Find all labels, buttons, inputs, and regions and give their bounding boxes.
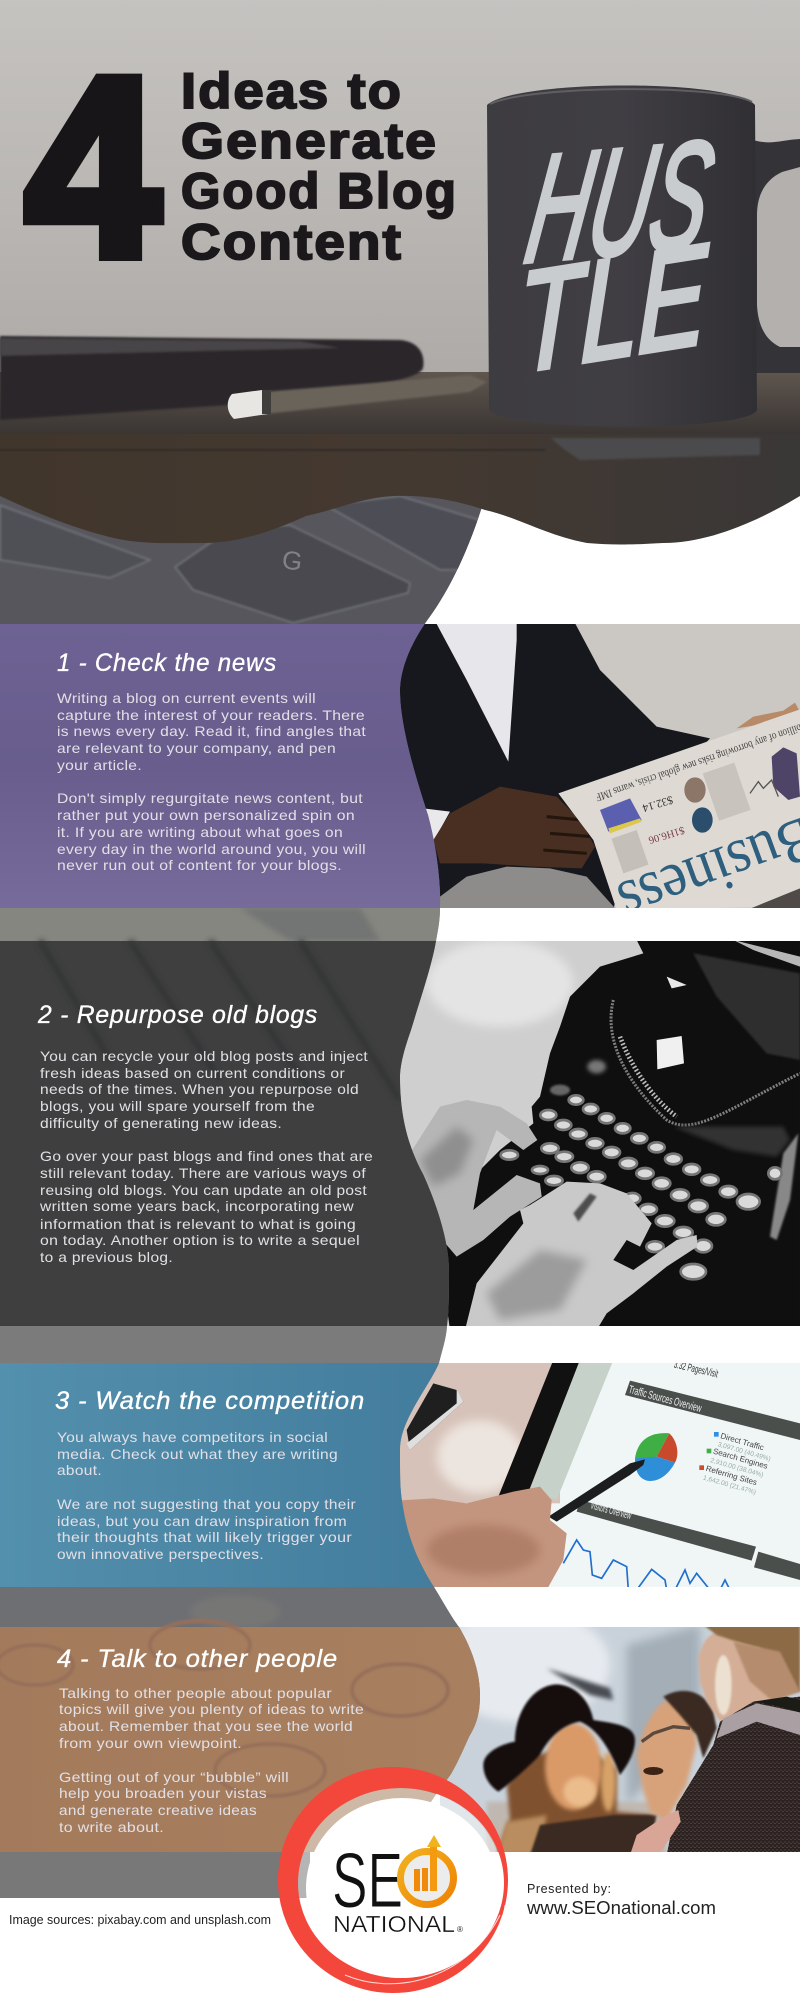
body 1: it. If you are writing about what goes on — [57, 824, 343, 840]
chart: pie — [635, 1433, 677, 1481]
body 3: about. — [57, 1462, 102, 1478]
photo: typewriter keys — [501, 1095, 782, 1279]
text block: 4 talk to other people — [57, 1645, 364, 1835]
panel: 2 repurpose old blogs background — [0, 941, 455, 1326]
mug — [487, 85, 800, 426]
desk top sheen — [0, 372, 800, 434]
body 1: Writing a blog on current events will — [57, 690, 316, 706]
body 3: their thoughts that will likely trigger your — [57, 1529, 352, 1545]
body 1: never run out of content for your blogs. — [57, 857, 342, 873]
body 4: help you broaden your vistas — [59, 1785, 267, 1801]
title: ideas to generate good blog content — [181, 63, 458, 270]
body 3: ideas, but you can draw inspiration from — [57, 1513, 347, 1529]
chart: legend: Direct Traffic — [719, 1431, 765, 1452]
background keyboard panel: G — [280, 544, 304, 577]
image sources note: Image sources: pixabay.com and unsplash.com — [9, 1913, 271, 1927]
pen — [228, 375, 487, 419]
photo: mug on desk header — [0, 0, 800, 552]
body 1 — [57, 690, 366, 873]
photo: typewriter and hands — [380, 940, 800, 1330]
photo: hand — [630, 1810, 681, 1855]
body 3: own innovative perspectives. — [57, 1546, 264, 1562]
photo: newspaper reader — [400, 624, 800, 908]
text block: 1 check the news — [57, 649, 366, 873]
photo: black hat — [483, 1684, 635, 1792]
logo: brush streaks — [345, 1905, 505, 1984]
body 4: Getting out of your “bubble” will — [59, 1769, 289, 1785]
photo: analytics tablet and pen — [380, 1359, 800, 1590]
photo: pen — [548, 1459, 645, 1522]
body 1: your article. — [57, 757, 142, 773]
logo: SE letters: SE — [332, 1836, 403, 1924]
photo text: newspaper figure two: $1H6.06 — [646, 824, 686, 845]
website url: www.SEOnational.com — [526, 1898, 716, 1918]
panel: 3 watch the competition background — [0, 1363, 445, 1587]
mug lettering TLE: TLE — [517, 213, 709, 402]
photo: face two — [637, 1700, 697, 1822]
body 2: written some years back, incorporating new — [39, 1198, 355, 1214]
desk — [0, 434, 800, 544]
heading 2: 2 - Repurpose old blogs — [37, 1001, 318, 1029]
body 3: You always have competitors in social — [57, 1429, 328, 1445]
chart: legend: 2,910.00 (38.04%) — [709, 1457, 764, 1479]
text block: 3 watch the competition — [55, 1387, 365, 1562]
body 1: are relevant to your company, and pen — [57, 740, 336, 756]
background keyboard panel — [0, 480, 500, 1900]
title: ideas to generate good blog content: Generate — [181, 113, 438, 169]
body 4: and generate creative ideas — [59, 1802, 257, 1818]
body 1: rather put your own personalized spin on — [57, 807, 355, 823]
logo: red brush ring — [278, 1767, 508, 1993]
body 2: fresh ideas based on current conditions or — [40, 1065, 345, 1081]
body 2: You can recycle your old blog posts and inject — [40, 1048, 368, 1064]
body 4 — [59, 1685, 364, 1835]
body 4: to write about. — [59, 1819, 164, 1835]
title: ideas to generate good blog content: Content — [181, 214, 403, 270]
heading 4: 4 - Talk to other people — [57, 1645, 338, 1673]
logo: registered mark: ® — [457, 1925, 463, 1934]
photo: sweater — [667, 1697, 800, 1855]
body 1: every day in the world around you, you will — [57, 841, 366, 857]
title: ideas to generate good blog content: Good Blog — [181, 163, 458, 219]
body 2: reusing old blogs. You can update an old post — [40, 1182, 367, 1198]
chart: legend — [699, 1431, 771, 1496]
logo: SEO National — [278, 1767, 508, 1993]
panel: 1 check the news background — [0, 624, 445, 908]
photo: hand holding pen — [402, 1486, 567, 1587]
logo: translucent inner ring — [297, 1788, 503, 1978]
chart: legend: 1,642.00 (21.47%) — [702, 1475, 757, 1496]
heading 3: 3 - Watch the competition — [55, 1387, 365, 1415]
panel: 4 talk to other people background — [0, 1627, 485, 1852]
logo: white disc — [306, 1798, 498, 1978]
dark tablet — [0, 336, 424, 420]
body 3 — [57, 1429, 356, 1562]
body 4: from your own viewpoint. — [59, 1735, 242, 1751]
body 2: information that is relevant to what is going — [40, 1216, 356, 1232]
body 4: about. Remember that you see the world — [59, 1718, 353, 1734]
photo text: newspaper figure one: $32.14 — [641, 793, 674, 814]
body 1: capture the interest of your readers. There — [57, 707, 365, 723]
photo text: visitors overview bar: Visitors Overview — [589, 1500, 633, 1522]
body 1: Don't simply regurgitate news content, but — [57, 790, 363, 806]
body 2: on today. Another option is to write a sequel — [40, 1232, 360, 1248]
body 2: Go over your past blogs and find ones that are — [40, 1148, 373, 1164]
body 2: needs of the times. When you repurpose old — [40, 1081, 359, 1097]
body 2: difficulty of generating new ideas. — [40, 1115, 282, 1131]
wall — [0, 0, 800, 380]
title: big numeral 4: 4 — [25, 25, 160, 310]
photo text: newspaper headline: billion of any borrowing risks new global crisis, warns IMF — [594, 721, 800, 803]
body 4: Talking to other people about popular — [59, 1685, 332, 1701]
body 4: topics will give you plenty of ideas to write — [59, 1701, 364, 1717]
presented by label: Presented by: — [527, 1882, 611, 1896]
photo text: pages per visit: 3.32 Pages/Visit — [673, 1359, 719, 1380]
photo: three women laughing — [437, 1608, 800, 1855]
body 2 — [39, 1048, 373, 1265]
body 3: We are not suggesting that you copy their — [57, 1496, 356, 1512]
chart: legend: Search Engines — [712, 1447, 769, 1471]
body 2: blogs, you will spare yourself from the — [40, 1098, 315, 1114]
photo: right hand — [465, 1182, 697, 1330]
chart: legend: 3,097.00 (40.49%) — [717, 1441, 771, 1463]
heading 1: 1 - Check the news — [57, 649, 277, 677]
chart: blue line — [563, 1540, 730, 1590]
photo: left hand — [410, 1100, 542, 1257]
text block: 2 repurpose old blogs — [37, 1001, 373, 1265]
title: ideas to generate good blog content: Ideas to — [181, 63, 403, 119]
photo text: traffic sources bar: Traffic Sources Overview — [627, 1384, 703, 1415]
logo: NATIONAL wordmark: NATIONAL — [333, 1911, 455, 1937]
body 2: to a previous blog. — [40, 1249, 173, 1265]
body 3: media. Check out what they are writing — [57, 1446, 338, 1462]
logo: orange O with bars and arrow — [400, 1835, 454, 1904]
chart: legend: Referring Sites — [705, 1464, 758, 1487]
photo: face one — [545, 1723, 602, 1810]
photo: woman three face and hair — [698, 1628, 773, 1722]
body 2: still relevant today. There are various ways of — [40, 1165, 366, 1181]
body 1: is news every day. Read it, find angles that — [57, 723, 366, 739]
